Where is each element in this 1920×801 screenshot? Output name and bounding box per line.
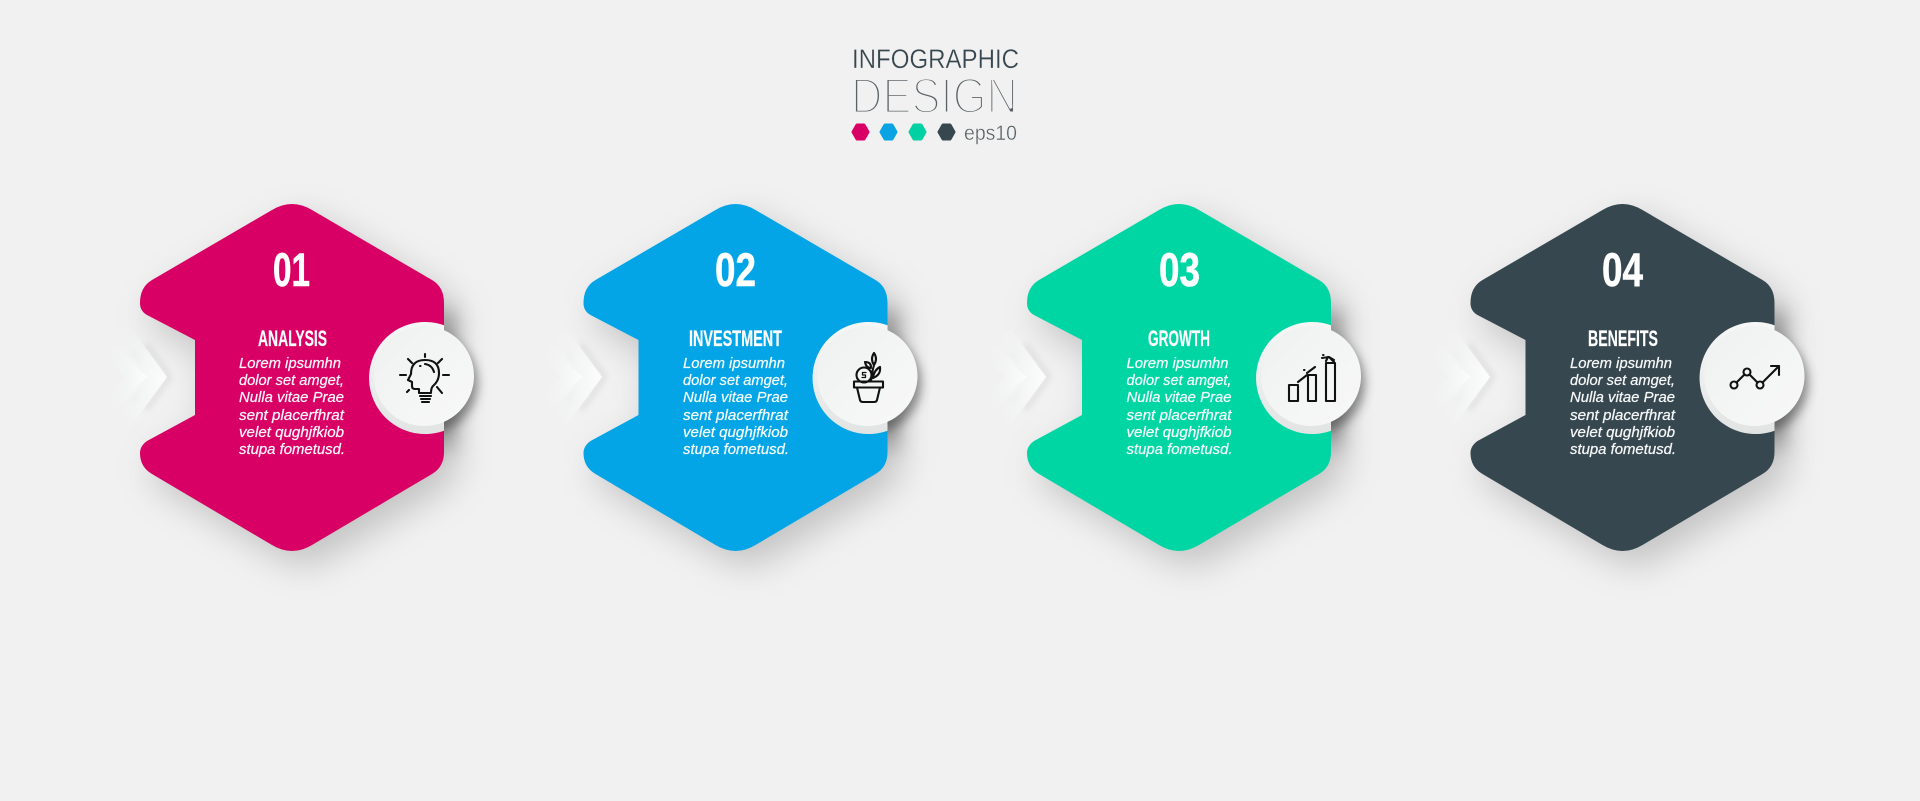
body text: velet qughjfkiob	[239, 425, 344, 441]
number: 03	[1159, 243, 1200, 296]
body text: dolor set amget,	[239, 373, 344, 389]
icon: light bulb head	[400, 354, 449, 402]
body text: dolor set amget,	[683, 373, 788, 389]
icon circle	[369, 322, 474, 434]
body text: sent placerfhrat	[1570, 408, 1676, 424]
icon: trend line with arrow	[1730, 366, 1779, 388]
icon: rising bars with climbers	[1289, 355, 1335, 401]
body text: stupa fometusd.	[683, 442, 789, 458]
hexagon card	[140, 204, 444, 551]
hexagon card	[1027, 204, 1331, 551]
hexagon card	[584, 204, 888, 551]
chevrons	[539, 328, 605, 426]
body text: sent placerfhrat	[1126, 408, 1233, 424]
body text: stupa fometusd.	[1126, 442, 1232, 458]
heading: ANALYSIS	[258, 326, 327, 351]
icon circle	[813, 322, 918, 434]
heading: GROWTH	[1148, 326, 1210, 351]
body text: sent placerfhrat	[239, 408, 345, 424]
body text: Lorem ipsumhn	[1126, 356, 1228, 372]
body text: Nulla vitae Prae	[683, 390, 788, 406]
panel: 01 analysis	[104, 204, 478, 565]
panel: 04 benefits	[1427, 204, 1808, 565]
chevrons	[104, 328, 170, 426]
panel: 03 growth	[983, 204, 1365, 565]
body text: Nulla vitae Prae	[1570, 390, 1675, 406]
body text: velet qughjfkiob	[683, 425, 788, 441]
body text: Nulla vitae Prae	[1126, 390, 1232, 406]
body text: stupa fometusd.	[1570, 442, 1676, 458]
icon circle	[1256, 322, 1361, 434]
body text: Nulla vitae Prae	[239, 390, 344, 406]
title block	[851, 44, 1019, 145]
icon: plant pot with coin	[854, 353, 883, 402]
body text: dolor set amget,	[1570, 373, 1675, 389]
chevrons	[983, 328, 1049, 426]
heading: infographic: INFOGRAPHIC	[852, 44, 1019, 74]
number: 04	[1602, 243, 1643, 296]
body text: velet qughjfkiob	[1570, 425, 1675, 441]
body text: velet qughjfkiob	[1126, 425, 1232, 441]
heading: INVESTMENT	[689, 326, 782, 351]
body text: Lorem ipsumhn	[683, 356, 785, 372]
body text	[1570, 356, 1676, 458]
panel: 02 investment	[539, 204, 922, 565]
body text: dolor set amget,	[1126, 373, 1232, 389]
body text	[683, 356, 789, 458]
body text: Lorem ipsumhn	[239, 356, 341, 372]
body text	[239, 356, 345, 458]
label: eps10: eps10	[964, 122, 1017, 145]
number: 02	[715, 243, 756, 296]
icon circle	[1700, 322, 1804, 434]
hexagon card	[1470, 204, 1774, 551]
body text: Lorem ipsumhn	[1570, 356, 1672, 372]
body text: sent placerfhrat	[683, 408, 789, 424]
heading: design: DESIGN	[851, 68, 1018, 124]
heading: BENEFITS	[1588, 326, 1658, 351]
body text: stupa fometusd.	[239, 442, 345, 458]
chevrons	[1427, 328, 1493, 426]
body text	[1126, 356, 1233, 458]
legend hexagons	[853, 125, 954, 139]
number: 01	[273, 243, 310, 296]
